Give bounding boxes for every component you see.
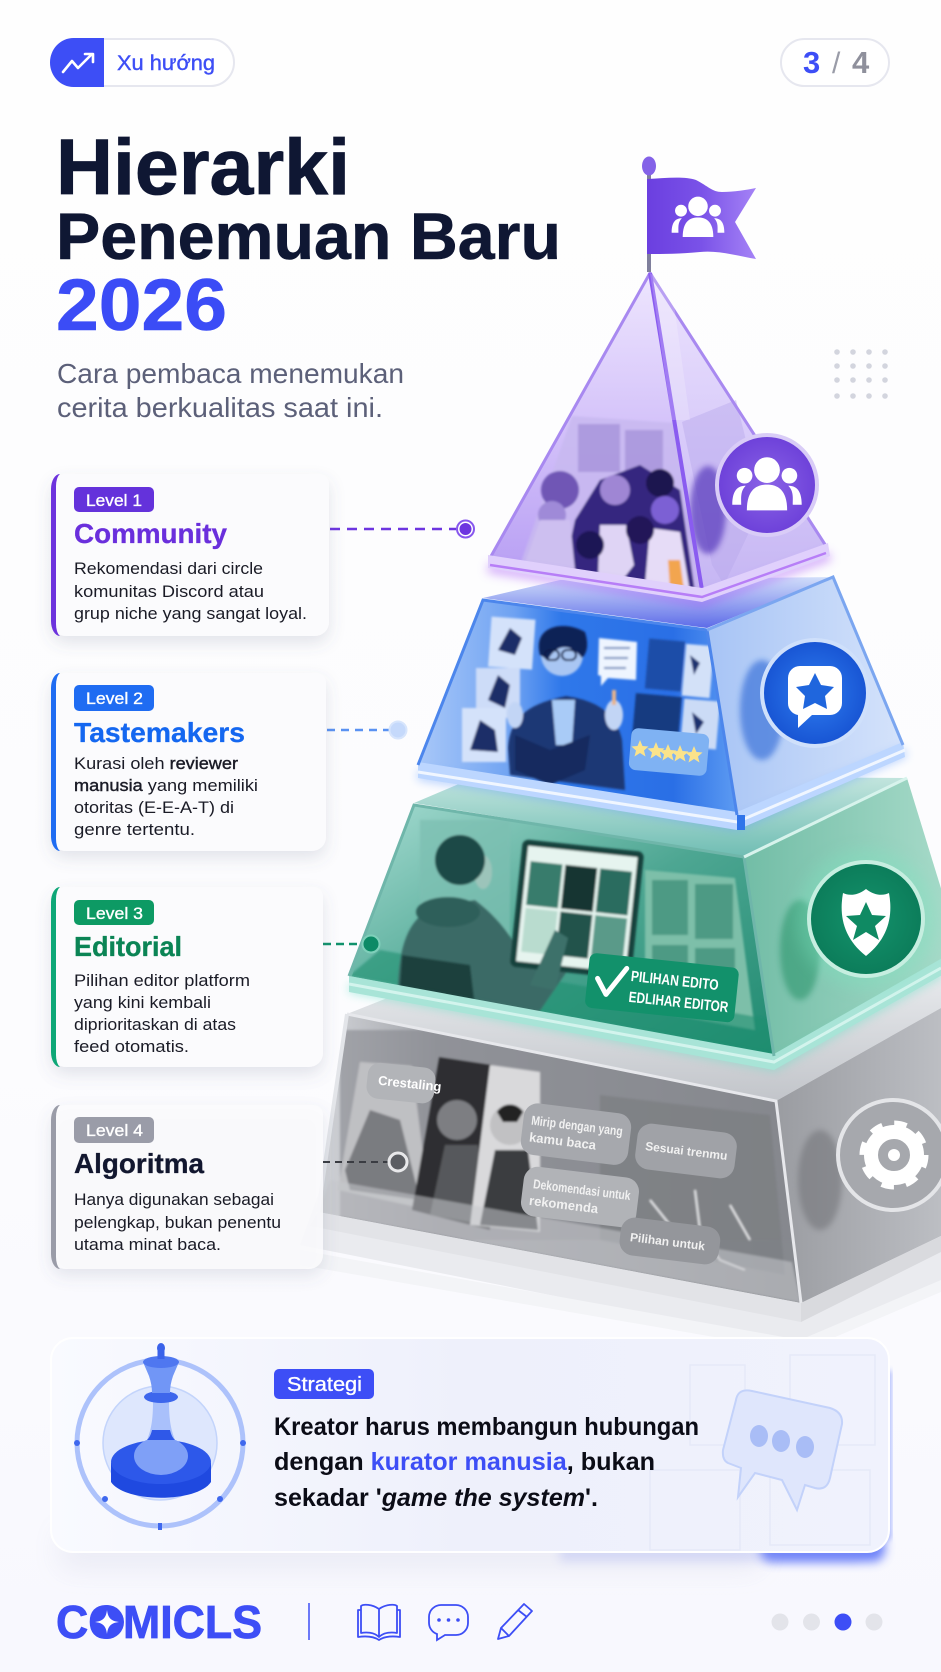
grey floating bubbles: Sesuai trenmu: [644, 1139, 728, 1163]
grey floating bubbles: Crestaling: [377, 1073, 442, 1094]
white sketch cards: [488, 617, 535, 670]
strategy text: Kreator harus membangun hubungan: [274, 1413, 699, 1441]
comics pages: [520, 416, 705, 590]
pyramid tier 1: purple community: [488, 273, 830, 602]
card: level 2 tastemakers: Level 2: [86, 690, 143, 708]
card: level 1 community: Community: [74, 518, 227, 549]
card: level 1 community: Level 1: [86, 492, 142, 510]
speech note: [598, 638, 637, 686]
card: level 2 tastemakers: manusia yang memiliki: [74, 776, 258, 795]
connector: level 3: [323, 936, 380, 952]
editor choice label: PILIHAN EDITO: [630, 968, 720, 994]
sketched backdrop: [600, 1096, 782, 1258]
card: level 2 tastemakers: Tastemakers: [74, 717, 245, 748]
grey floating bubbles: kamu baca: [528, 1130, 598, 1153]
trend badge: [50, 38, 234, 87]
right face sketch: [798, 1130, 842, 1230]
glass edges: [490, 273, 826, 558]
glass front rim: [310, 1212, 801, 1322]
grey floating bubbles: Mirip dengan yang: [530, 1113, 624, 1139]
faint comic sketches: [650, 1355, 875, 1550]
flag: [642, 156, 756, 272]
card: level 2 tastemakers: [51, 673, 326, 851]
trend badge: Xu hướng: [117, 52, 215, 75]
grey floating bubbles: Pilihan untuk: [629, 1230, 706, 1253]
card: level 4 algoritma: pelengkap, bukan penentu: [74, 1213, 281, 1232]
glass lip: [418, 752, 905, 825]
logo: COMICLS: [56, 1596, 262, 1648]
icon: gear medallion: [838, 1100, 941, 1210]
icon: green shield medallion: [796, 849, 936, 989]
title: 2026: [56, 265, 227, 346]
icon: open book: [358, 1605, 400, 1640]
glass lip: [349, 972, 941, 1066]
title: Hierarki: [56, 122, 350, 211]
back wall sketch: [682, 400, 762, 585]
card: level 1 community: komunitas Discord atau: [74, 582, 264, 601]
panel: strategy: [51, 1338, 891, 1570]
pyramid tier 4: grey algorithm: [323, 976, 941, 1337]
strategy text: [274, 1413, 699, 1512]
comic panels: [338, 1062, 430, 1210]
card: level 3 editorial: Pilihan editor platform: [74, 971, 250, 990]
icon: logo star: [90, 1605, 124, 1639]
card: level 3 editorial: yang kini kembali: [74, 993, 211, 1012]
left face: [318, 1014, 801, 1303]
page indicator: [781, 39, 889, 86]
grey floating bubbles: rekomenda: [528, 1193, 600, 1216]
icon: pencil: [498, 1604, 532, 1639]
comics panels: [645, 639, 685, 691]
card: level 4 algoritma: Level 4: [86, 1122, 143, 1140]
card: level 1 community: Rekomendasi dari circle: [74, 559, 263, 578]
crowd: [560, 465, 695, 592]
icon: chess king: [74, 1343, 246, 1530]
card: level 1 community: grup niche yang sangat loyal.: [74, 604, 307, 623]
title: [56, 122, 561, 346]
connector: level 4: [323, 1153, 407, 1171]
divider: [308, 1603, 310, 1640]
strategy text: dengan kurator manusia, bukan: [274, 1448, 655, 1476]
title: Penemuan Baru: [56, 199, 561, 273]
card: level 3 editorial: diprioritaskan di atas: [74, 1015, 236, 1034]
icon: chat bubble: [429, 1605, 468, 1640]
rating card: [628, 728, 710, 776]
card: level 1 community: [51, 474, 329, 636]
card: level 4 algoritma: [51, 1105, 323, 1269]
subtitle: Cara pembaca menemukan: [57, 358, 404, 389]
card: level 3 editorial: Editorial: [74, 931, 182, 962]
card: level 3 editorial: [51, 887, 323, 1067]
connector: level 2: [327, 722, 406, 738]
pagination dots: [772, 1614, 882, 1630]
connector: level 1: [330, 520, 474, 538]
tablet: [510, 839, 644, 979]
pyramid tier 3: green editorial: [349, 775, 941, 1070]
card: level 4 algoritma: utama minat baca.: [74, 1235, 221, 1254]
pyramid tier 2: blue tastemakers: [418, 577, 905, 830]
right face: [776, 1008, 941, 1303]
subtitle: [57, 358, 404, 423]
panel: strategy: Strategi: [287, 1374, 362, 1396]
card: level 3 editorial: Level 3: [86, 905, 143, 923]
page indicator: 4: [852, 45, 870, 80]
card: level 2 tastemakers: otoritas (E-E-A-T) di: [74, 798, 234, 817]
character: [508, 696, 625, 790]
subtitle: cerita berkualitas saat ini.: [57, 392, 383, 423]
editor choice label: EDLIHAR EDITOR: [628, 989, 729, 1016]
icon: purple people medallion: [717, 435, 817, 535]
dot grid decoration: [834, 349, 888, 399]
grey floating bubbles: [365, 1062, 738, 1266]
icon: glass speech bubble: [723, 1390, 842, 1510]
page indicator: 3: [803, 45, 820, 80]
strategy tag: [274, 1369, 374, 1399]
strategy text: sekadar 'game the system'.: [274, 1484, 598, 1512]
top face: [347, 960, 941, 1101]
card: level 2 tastemakers: Kurasi oleh reviewer: [74, 754, 238, 773]
page indicator: /: [832, 47, 841, 80]
pennant: [647, 178, 756, 259]
card: level 2 tastemakers: genre tertentu.: [74, 820, 195, 839]
icon: trending arrow: [63, 54, 93, 72]
card: level 3 editorial: feed otomatis.: [74, 1037, 189, 1056]
card: level 4 algoritma: Algoritma: [74, 1148, 204, 1179]
pole: [647, 172, 651, 272]
person from behind: [397, 899, 566, 1011]
grey floating bubbles: Dekomendasi untuk: [532, 1176, 632, 1203]
icon: blue star chat medallion: [762, 640, 868, 746]
editor choice label: [584, 953, 739, 1023]
card: level 4 algoritma: Hanya digunakan sebagai: [74, 1190, 274, 1209]
backdrop: [420, 820, 510, 950]
base plate: [300, 1190, 941, 1345]
